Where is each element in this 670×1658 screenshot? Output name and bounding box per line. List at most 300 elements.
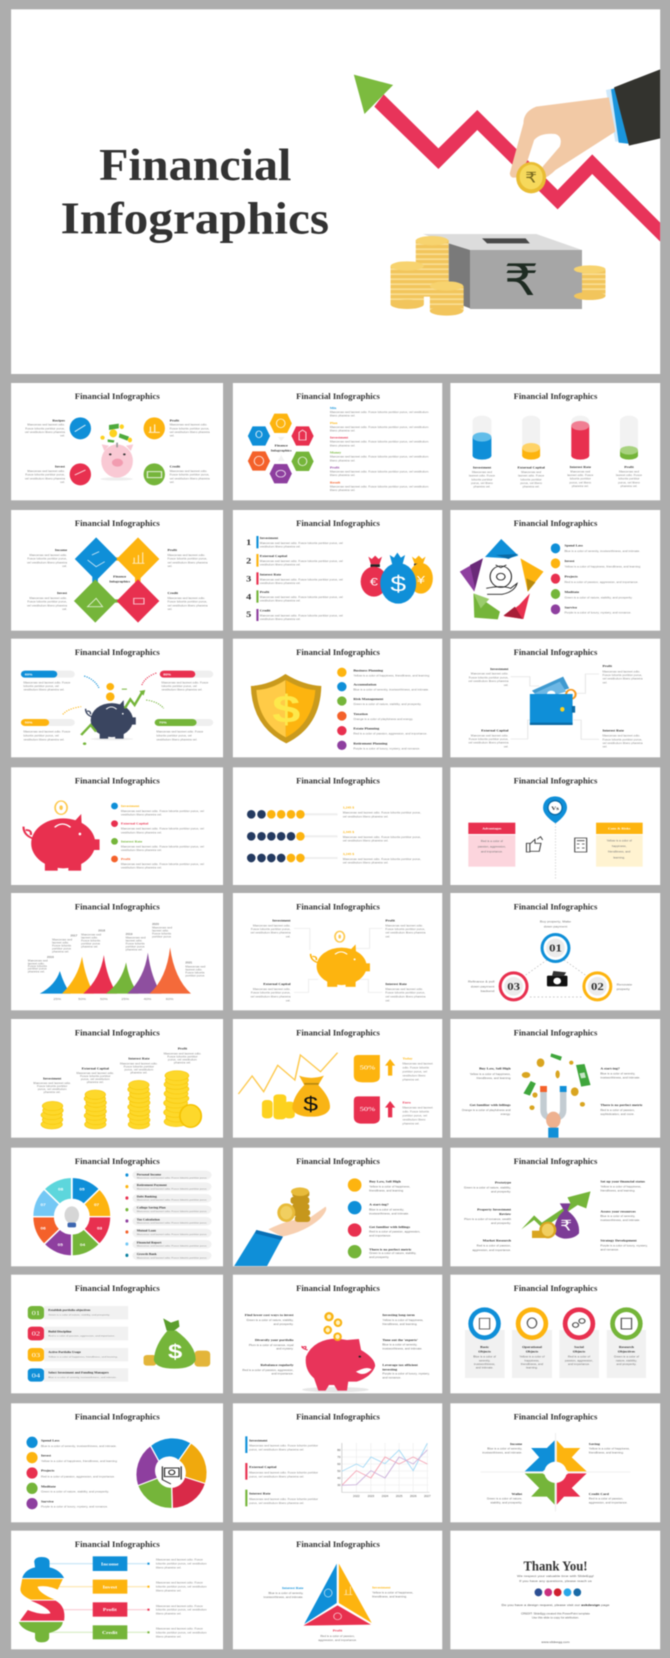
text: rows: vel vestibulum libero pharetra vel. <box>343 815 389 818</box>
text: interest rate: vel. <box>602 745 608 749</box>
icon: money bag and coins: $ <box>303 1093 318 1116</box>
text: interest rate: Blue is a color of serenity, <box>268 1591 304 1595</box>
panel: coin pictograms <box>233 767 442 885</box>
text: profit: Maecenas sed laoreet odio. <box>164 1052 202 1055</box>
text blocks: Maecenas sed laoreet odio. Fusce <box>156 1581 203 1585</box>
panel: pentagon of arrows <box>450 510 660 631</box>
text: external capital: Maecenas sed laoreet odio. Fusce lobortis porttitor <box>249 1471 318 1474</box>
text: credit <box>170 465 210 484</box>
list: Buy Low, Sell High <box>369 1180 401 1184</box>
text: profit: vel. <box>170 434 175 438</box>
step rings: 03 <box>507 982 520 993</box>
list: Projects <box>41 1469 55 1473</box>
item list: Maecenas sed laoreet odio. Fusce lobortis porttitor purus, vel vestibulum <box>330 410 429 414</box>
step list: 01 <box>32 1309 40 1317</box>
card: advantages: and importance. <box>481 850 503 854</box>
list: Maecenas sed laoreet odio. Fusce lobortis porttitor purus, vel <box>121 862 204 866</box>
text: start: Blue is a color of serenity, <box>600 1072 636 1076</box>
panel: rupee bag with growth arrow <box>450 1148 660 1266</box>
text: investment: Maecenas sed <box>472 470 492 474</box>
icon: hand dropping coin: ₹ <box>525 169 537 186</box>
step list: Active Portfolio Usage <box>48 1350 81 1354</box>
step rings: 02 <box>591 982 604 993</box>
text: investment: laoreet odio. Fusce <box>469 474 496 478</box>
label boxes: Invest <box>103 1586 117 1590</box>
connector lines <box>294 928 382 992</box>
list: Invest <box>41 1454 52 1458</box>
numbered list: 4 <box>246 592 252 601</box>
text: investment: friendliness, and learning. <box>372 1595 407 1598</box>
text: rows: 3,245 $ <box>343 852 355 856</box>
text: invest: vel vestibulum libero pharetra <box>27 604 68 607</box>
list: Maecenas sed laoreet odio. Fusce lobortis porttitor purus, vel <box>121 827 204 831</box>
text: profit: laoreet odio. Fusce <box>616 473 643 477</box>
centre label: Finance <box>113 575 127 578</box>
right tips: and romance. <box>382 1376 401 1380</box>
text blocks: lobortis porttitor purus, vel vestibulum <box>156 1608 208 1612</box>
text blocks: Maecenas sed laoreet odio. Fusce <box>156 730 204 734</box>
item list: Purple is a color of luxury, mystery, and romance. <box>564 611 632 615</box>
chart: line chart: 30 <box>337 1483 341 1487</box>
text: income <box>27 548 68 568</box>
text: interest rate: vel. <box>385 999 390 1002</box>
text: interest rate: vel vestibulum libero pharetra <box>385 995 426 998</box>
text: interest rate: Interest Rate <box>128 1057 150 1061</box>
item list: Projects <box>564 575 579 579</box>
list: Yellow is a color of happiness, <box>369 1185 410 1188</box>
text: step labels: down payment <box>544 925 567 928</box>
chart: segmented ring <box>32 1177 111 1256</box>
text: profit <box>168 548 208 568</box>
card: operational objects: Operational <box>522 1345 542 1349</box>
slide heading: Financial Infographics <box>514 777 597 786</box>
text: start: A start-ing? <box>600 1067 620 1071</box>
text: profit: vel vestibulum libero pharetra <box>385 931 426 935</box>
panel: progress bars with navy piggy <box>11 639 223 757</box>
text: step labels: property <box>617 987 630 991</box>
text: investment: Maecenas sed laoreet odio. <box>471 672 509 676</box>
progress bars: 80% <box>163 673 171 676</box>
text: peak notes: Maecenas sed <box>152 926 173 930</box>
planning list: Business Planning <box>353 669 383 673</box>
icon: wallet with bills <box>530 677 576 725</box>
text: external capital: Maecenas sed laoreet odio. <box>76 1071 114 1075</box>
text: peak notes: Fusce lobortis <box>185 971 205 974</box>
text: profit <box>616 465 643 488</box>
list <box>348 1178 421 1259</box>
text: income: vel vestibulum libero pharetra <box>27 561 68 564</box>
text: peak notes: 2021 <box>185 961 193 965</box>
text: external capital: pharetra vel. <box>87 1080 104 1084</box>
icon: growth arrow, bag and coin: ₹ <box>560 1217 572 1234</box>
icon: thumbs up <box>526 837 543 852</box>
slide heading: Financial Infographics <box>296 1413 380 1422</box>
card: risks: Cons & Risks <box>608 827 631 831</box>
panel: three step cycle <box>450 893 660 1010</box>
item list: Green is a color of nature, stability, and prosperity. <box>564 596 633 599</box>
list: Retirement Payment <box>137 1183 167 1187</box>
item list: Money <box>330 451 341 455</box>
row: slides 2 to 7 <box>11 383 660 631</box>
list: Growth Bank <box>137 1252 157 1256</box>
numbered list: Investment <box>260 536 279 540</box>
label boxes: Profit <box>103 1608 117 1613</box>
list: Blue is a color of serenity, <box>369 1208 404 1211</box>
slide heading: Financial Infographics <box>514 902 597 912</box>
diamond cluster <box>74 537 159 623</box>
text: peak notes: Maecenas sed <box>126 936 146 940</box>
text: investment: pharetra vel. <box>473 485 491 489</box>
slide heading: Financial Infographics <box>75 392 160 402</box>
text: peak notes: Fusce lobortis <box>126 942 145 946</box>
text: credit: vel. <box>170 480 175 484</box>
text: buy low: Buy Low, Sell High <box>479 1067 511 1071</box>
right tips: Purple is a color of luxury, mystery, <box>382 1372 430 1376</box>
icon: falling coins and bills <box>100 424 132 443</box>
card: operational objects: Yellow is a color of <box>519 1355 545 1359</box>
planning list: Taxation <box>353 712 368 716</box>
text: no perfect metric: sophistication, and more. <box>600 1112 635 1116</box>
list <box>26 1437 117 1509</box>
stat: today: 50% <box>360 1064 376 1071</box>
list: Profit <box>121 857 131 861</box>
panel: portfolio steps with green bag <box>11 1275 223 1393</box>
row: slides 8 to 13 <box>11 639 660 885</box>
text: invest: Maecenas sed laoreet odio. <box>27 469 65 473</box>
chart: segmented ring: 08 <box>58 1187 64 1192</box>
numbered list: Maecenas sed laoreet odio. Fusce lobortis porttitor purus, vel <box>260 541 343 545</box>
card: operational objects <box>512 1307 552 1378</box>
right text blocks: Yellow is a color of happiness, <box>600 1185 642 1188</box>
planning list: Blue is a color of serenity, trustworthiness, and intimate. <box>353 688 429 692</box>
list: and prosperity. <box>369 1255 390 1259</box>
text: profit: Maecenas sed laoreet odio. <box>602 670 640 673</box>
list: Financial Report <box>137 1241 161 1244</box>
card: risks: Yellow is a color of <box>607 839 632 843</box>
text: saving: Saving <box>589 1442 600 1446</box>
text: investment: Investment <box>372 1586 391 1589</box>
list: External Capital <box>121 822 148 826</box>
text: peak notes: laoreet odio. <box>185 968 203 971</box>
item list: Invest <box>564 559 575 563</box>
text: income: Fusce lobortis porttitor purus, <box>25 427 65 430</box>
icon: growth arrow, bag and coin <box>521 1191 591 1239</box>
slide heading: Financial Infographics <box>514 392 597 402</box>
text: profit: Maecenas sed <box>619 470 639 473</box>
panel: hand holding coins <box>233 1148 442 1266</box>
icon: banded dollar sign <box>19 1557 64 1642</box>
right text blocks: Blue is a color of serenity, <box>600 1214 636 1218</box>
chart: peaks: 25% <box>53 997 61 1001</box>
text: no perfect metric <box>600 1103 643 1116</box>
left text blocks: Market Research <box>483 1239 511 1243</box>
text: external capital: Fusce lobortis porttitor purus, <box>251 991 291 995</box>
text: wallet: Green is a color of nature, <box>487 1497 522 1501</box>
card: advantages: Red is a color of <box>481 839 503 843</box>
text: investment: Yellow is a color of happiness, <box>372 1591 413 1594</box>
text: wallet: stability, and prosperity. <box>490 1501 522 1505</box>
item list <box>551 543 641 615</box>
text: profit: Maecenas sed laoreet odio. <box>170 423 208 427</box>
stat: today <box>354 1055 433 1082</box>
text: rows <box>343 806 421 865</box>
left text blocks: Green is a color of nature, stability, <box>464 1186 511 1190</box>
list: Blue is a color of serenity, trustworthiness, and intimate. <box>41 1444 117 1448</box>
text: credit card: Credit Card <box>589 1492 609 1496</box>
list: Maecenas sed laoreet odio. Fusce lobortis porttitor purus <box>137 1210 207 1213</box>
list: Survive <box>41 1500 54 1503</box>
slide heading: Financial Infographics <box>296 1284 380 1294</box>
text: external capital: Fusce lobortis porttitor purus, <box>469 737 509 741</box>
card: advantages: passion, aggression, <box>478 845 506 848</box>
text: peak notes: Fusce lobortis <box>28 964 48 968</box>
text blocks: lobortis porttitor purus, vel vestibulum <box>156 1631 208 1635</box>
stat: today: Maecenas sed laoreet <box>403 1062 433 1065</box>
text blocks: Maecenas sed laoreet odio. Fusce <box>156 1558 203 1561</box>
right text blocks: Strategy Development <box>600 1239 638 1243</box>
text: peak notes: laoreet odio. <box>28 962 45 965</box>
text: interest rate <box>567 465 594 488</box>
list: Maecenas sed laoreet odio. Fusce lobortis porttitor purus <box>137 1188 207 1190</box>
item list: Yellow is a color of happiness, friendliness, and learning <box>564 565 641 568</box>
card: social objects: and importance. <box>568 1362 590 1366</box>
right tips <box>382 1313 430 1380</box>
text blocks: lobortis porttitor purus, vel <box>156 734 192 737</box>
chart: peaks: 60% <box>166 997 173 1001</box>
planning list: Yellow is a color of happiness, friendliness, and learning <box>353 674 430 677</box>
text: profit: Profit <box>602 664 613 668</box>
panel: thank you <box>450 1531 660 1649</box>
text: interest rate: Fusce lobortis porttitor <box>124 1065 154 1068</box>
chart: line chart: 2022 <box>353 1494 360 1498</box>
text: peak notes: 2018 <box>98 929 106 933</box>
text: peak notes: porttitor purus <box>185 974 205 977</box>
chart: peaks: 50% <box>100 997 108 1001</box>
chart: line chart: 2026 <box>410 1494 417 1498</box>
message: If you have any questions, please reach us <box>519 1579 592 1583</box>
chart: line chart: 80 <box>337 1448 341 1452</box>
left tips: Diversify your portfolio <box>255 1338 294 1342</box>
centre label: Infographics <box>109 580 131 584</box>
numbered list: Maecenas sed laoreet odio. Fusce lobortis porttitor purus, vel <box>260 578 343 581</box>
icon: money bags <box>361 553 433 604</box>
chart: segmented ring: 03 <box>97 1226 103 1230</box>
text: credit: vel vestibulum libero pharetra <box>170 477 210 480</box>
numbered list: 1 <box>246 538 252 547</box>
stat: rate: Euro <box>403 1101 411 1105</box>
numbered list: External Capital <box>260 554 287 558</box>
text: peak notes: porttitor purus <box>152 935 172 939</box>
slide heading: Financial Infographics <box>75 1157 160 1167</box>
right tips: trustworthiness, and intimate. <box>382 1347 423 1351</box>
text: profit: pharetra vel. <box>620 484 638 488</box>
text: peak notes: laoreet odio. <box>52 941 69 944</box>
right tips: Leverage tax efficient <box>382 1363 419 1367</box>
text: no perfect metric: There is no perfect metric <box>600 1103 643 1107</box>
item list: libero pharetra vel. <box>330 414 356 418</box>
text: investment: purus, vel libero <box>471 481 493 485</box>
text: step labels: Renovate <box>617 983 632 986</box>
text: peak notes: pharetra vel. <box>81 945 98 948</box>
stat: today: pharetra vel. <box>403 1078 420 1081</box>
numbered list: vestibulum libero pharetra vel. <box>260 563 301 567</box>
list: and importance. <box>369 1234 391 1238</box>
right tips: Blue is a color of serenity, <box>382 1343 418 1347</box>
text: peak notes: pharetra vel. <box>52 950 69 953</box>
list: Yellow is a color of happiness, friendliness, and learning <box>41 1459 117 1463</box>
left tips: and mystery. <box>276 1347 294 1351</box>
text: external capital: laoreet odio. Fusce <box>518 474 545 478</box>
text: income: vel. <box>60 434 65 438</box>
text: peak notes: porttitor purus <box>126 945 145 949</box>
slide heading: Financial Infographics <box>296 1028 380 1038</box>
item list: Maecenas sed laoreet odio. Fusce lobortis porttitor purus, vel vestibulum <box>330 455 429 459</box>
slide heading: Financial Infographics <box>75 777 160 786</box>
design request line: Do you have a design request, please visit our askdesign page <box>501 1603 610 1607</box>
text: profit <box>164 1047 202 1064</box>
item list: libero pharetra vel. <box>330 429 356 433</box>
text: rows: 2,345 $ <box>343 830 355 834</box>
text: get familiar: energy. <box>501 1112 511 1116</box>
panel: magnet attracting money <box>450 1019 660 1138</box>
slide heading: Financial Infographics <box>75 519 160 529</box>
list: Maecenas sed laoreet odio. Fusce lobortis porttitor purus <box>137 1199 207 1202</box>
list: Maecenas sed laoreet odio. Fusce lobortis porttitor purus <box>137 1233 207 1236</box>
text: peak notes: laoreet odio. <box>126 939 143 943</box>
list: vestibulum libero pharetra vel. <box>121 813 162 817</box>
list: Meditate <box>41 1485 56 1488</box>
step list: Establish portfolio objectives <box>48 1308 91 1312</box>
list: Green is a color of nature, stability, <box>369 1251 417 1255</box>
text: profit: Fusce lobortis porttitor purus, <box>602 673 642 677</box>
text: peak notes: porttitor purus <box>81 942 101 945</box>
text: peak notes <box>28 922 206 977</box>
text: interest rate: lobortis porttitor <box>570 477 591 481</box>
list: Spend Less <box>41 1439 60 1443</box>
triangle diagram <box>303 1564 372 1626</box>
text: income: Income <box>55 548 68 552</box>
text blocks: Maecenas sed laoreet odio. Fusce <box>156 1604 203 1608</box>
icon: coin stacks <box>391 236 605 316</box>
versus pin and dotted line: Vs <box>551 807 560 812</box>
left text blocks <box>464 1181 512 1252</box>
card: basic objects: Basic <box>480 1345 489 1349</box>
slide heading: Financial Infographics <box>296 1157 380 1167</box>
numbered list <box>246 536 343 621</box>
text: peak notes: 2020 <box>152 922 159 926</box>
slide heading: Financial Infographics <box>296 902 380 912</box>
text: investment: Maecenas sed laoreet odio. <box>253 924 291 927</box>
card: social objects: Red is a color of <box>568 1355 590 1359</box>
text: peak notes: 2016 <box>47 955 54 959</box>
list: trustworthiness, and intimate. <box>369 1212 409 1215</box>
panel: mountain chart <box>11 893 223 1010</box>
text: invest: Maecenas sed laoreet odio. <box>29 596 67 600</box>
hexagon ring <box>248 414 314 483</box>
numbered list: vestibulum libero pharetra vel. <box>260 599 301 603</box>
panel: four diamonds <box>11 510 223 631</box>
text: profit: aggression, and importance. <box>318 1638 357 1642</box>
title: Financial <box>99 141 291 190</box>
row: slides 14 to 19 <box>11 893 660 1138</box>
text: peak notes: Maecenas sed <box>81 933 102 936</box>
text: investment: Investment <box>249 1439 268 1443</box>
panel: shield and planning list <box>233 639 442 757</box>
right tips: Investing long-term <box>382 1313 415 1317</box>
item list: Maecenas sed laoreet odio. Fusce lobortis porttitor purus, vel vestibulum <box>330 470 429 473</box>
text: investment: Investment <box>490 667 509 671</box>
chart: coin stacks <box>41 1071 201 1129</box>
text: peak notes: laoreet odio. <box>81 936 98 939</box>
left text blocks: Red is a color of passion, <box>477 1244 511 1248</box>
text: income: trustworthiness, and intimate. <box>482 1451 522 1455</box>
stat: rate: vestibulum libero <box>403 1118 426 1121</box>
left text blocks: and prosperity. <box>491 1190 511 1194</box>
text: external capital: lobortis porttitor <box>521 478 542 481</box>
stat: today: vestibulum libero <box>403 1074 426 1077</box>
list: Maecenas sed laoreet odio. Fusce lobortis porttitor purus <box>137 1177 207 1179</box>
planning list: Risk Management <box>353 697 384 701</box>
chart: peaks: 40% <box>144 997 151 1001</box>
chart: segmented ring: 05 <box>58 1243 64 1247</box>
list: Maecenas sed laoreet odio. Fusce lobortis porttitor purus, vel <box>121 809 204 813</box>
text: interest rate: Interest Rate <box>570 465 591 469</box>
text: credit <box>168 591 208 611</box>
icon: money bag and coins <box>262 1076 330 1119</box>
text blocks: lobortis porttitor purus, vel <box>24 734 59 737</box>
text: credit: vel vestibulum libero pharetra <box>168 604 208 607</box>
icon: hand with coins <box>234 1187 326 1266</box>
text: investment: Investment <box>473 466 492 470</box>
slide heading: Financial Infographics <box>296 1540 380 1550</box>
item list: Maecenas sed laoreet odio. Fusce lobortis porttitor purus, vel vestibulum <box>330 485 429 488</box>
text: profit: Fusce lobortis porttitor <box>167 1055 198 1058</box>
connector lines <box>49 1563 150 1633</box>
text: invest: Invest <box>55 465 66 469</box>
progress bars: 50% <box>25 721 32 725</box>
panel: five segment ring <box>11 1403 223 1522</box>
cross lines <box>481 1433 630 1511</box>
text: profit: vel. <box>602 681 608 684</box>
item list: Investment <box>330 436 349 440</box>
card: basic objects: trustworthiness, <box>474 1362 496 1366</box>
list: Tax Calculation <box>137 1218 160 1221</box>
text: interest rate: Maecenas sed laoreet odio. <box>385 987 423 991</box>
panel: coin stack chart <box>11 1019 223 1138</box>
text: profit <box>385 919 426 939</box>
text: investment: purus, vel vestibulum <box>38 1087 67 1091</box>
left text blocks: Property Investment <box>477 1208 512 1211</box>
panel: triangle <box>233 1531 442 1649</box>
text: credit: Credit <box>170 465 181 469</box>
numbered list: Maecenas sed laoreet odio. Fusce lobortis porttitor purus, vel <box>260 559 343 563</box>
text: profit: purus, vel libero <box>618 481 640 484</box>
text: step labels: down payment <box>471 985 494 988</box>
icon: hand holding money bag <box>486 565 517 594</box>
chart: segmented ring: 04 <box>80 1243 86 1247</box>
left tips: Green is a color of nature, stability, <box>246 1318 294 1322</box>
label boxes: Credit <box>102 1631 118 1636</box>
text: saving <box>589 1442 630 1455</box>
text: credit: Maecenas sed laoreet odio. <box>168 596 205 600</box>
panel: yellow piggy <box>233 893 442 1010</box>
text: rows: vel vestibulum libero pharetra vel. <box>343 839 389 843</box>
text: get familiar: Get familiar with fellings <box>470 1103 511 1107</box>
text: buy low: friendliness, and learning <box>477 1076 511 1080</box>
text: external capital <box>468 729 509 748</box>
text blocks: lobortis porttitor purus, vel <box>24 684 59 688</box>
stat: rate: pharetra vel. <box>403 1122 420 1125</box>
